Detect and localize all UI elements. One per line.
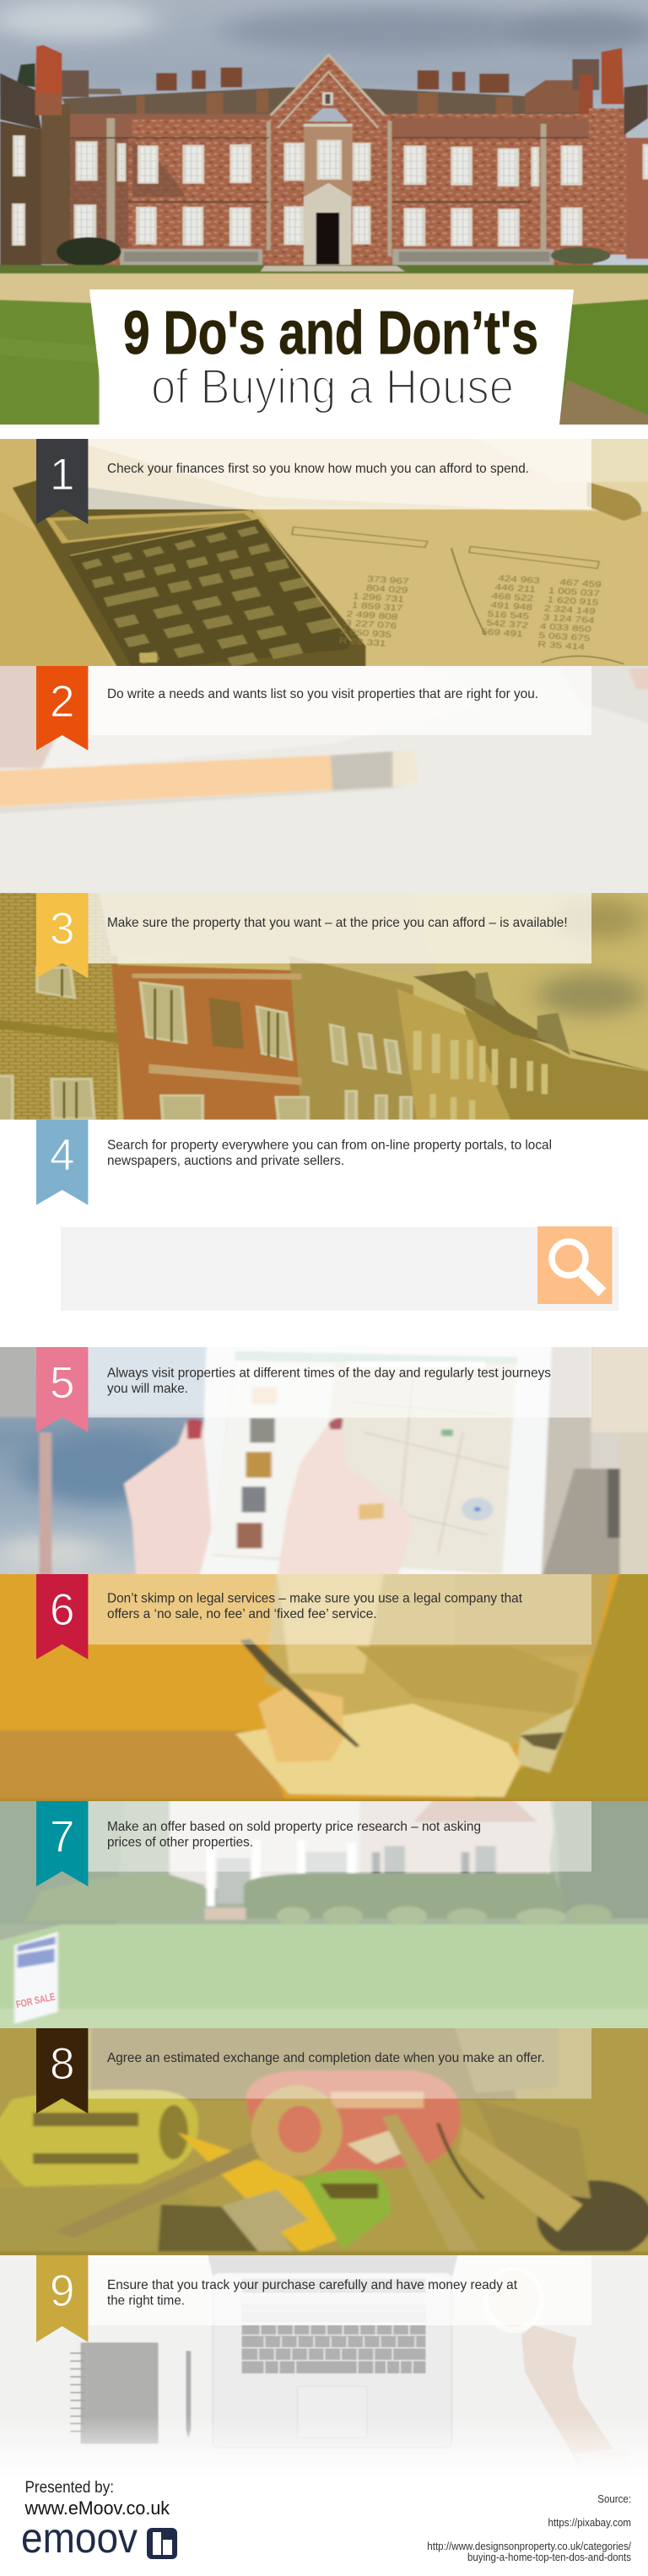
- photo: calculator and finance paperwork: [0, 434, 648, 672]
- central bay: [304, 124, 353, 203]
- text box: [88, 2255, 591, 2325]
- photo: calculator and finance paperwork: R 28 331: [338, 636, 386, 648]
- text box: [88, 1347, 591, 1418]
- photo: calculator and finance paperwork: 373 967: [367, 574, 410, 587]
- right tower and wing: [589, 108, 626, 255]
- title panel: [89, 290, 574, 425]
- main facade: [68, 114, 593, 266]
- ribbon number 9: 9: [50, 2266, 74, 2316]
- photo: calculator and finance paperwork: 424 963: [498, 573, 541, 586]
- panel: step 4: [36, 1120, 618, 1311]
- panel: step 9: [0, 2251, 648, 2479]
- ribbon number 3: [36, 893, 88, 978]
- ribbon number 1: [36, 439, 88, 524]
- source credits: buying-a-home-top-ten-dos-and-donts: [467, 2551, 631, 2563]
- step text: [107, 1820, 481, 1850]
- photo: calculator and finance paperwork: 4 050 935: [339, 626, 392, 640]
- step text: prices of other properties.: [107, 1835, 253, 1850]
- panel: step 1: [0, 434, 648, 672]
- photo: pencil on grid paper: [0, 659, 648, 897]
- text box: [88, 2028, 591, 2098]
- text box: [88, 893, 591, 964]
- text box: [88, 1574, 591, 1644]
- ribbon number 3: 3: [50, 904, 74, 954]
- ribbon number 6: 6: [50, 1585, 74, 1635]
- footer: presented by: [24, 2479, 170, 2519]
- hands: [124, 1421, 212, 1580]
- step text: Always visit properties at different times of the day and regularly test journeys: [107, 1366, 551, 1381]
- step text: Don’t skimp on legal services – make sure you use a legal company that: [107, 1592, 523, 1605]
- balustrades: [120, 249, 554, 268]
- text box: [88, 439, 591, 510]
- step text: Search for property everywhere you can from on-line property portals, to local: [107, 1138, 552, 1153]
- step text: [107, 1138, 552, 1168]
- logo: emoov: emoov: [21, 2514, 138, 2562]
- panel: step 6: [0, 1568, 648, 1809]
- ribbon number 7: 7: [50, 1812, 74, 1862]
- photo: calculator and finance paperwork: 446 211: [494, 582, 537, 594]
- icon: magnifying glass: [552, 1242, 602, 1292]
- lower windows: [75, 205, 95, 241]
- bushes: [57, 237, 122, 267]
- photo: calculator and finance paperwork: 1 859 317: [351, 600, 404, 613]
- quoins and courses: [106, 118, 547, 257]
- footer: website address: www.eMoov.co.uk: [24, 2498, 170, 2519]
- central gable: [270, 57, 381, 120]
- left wing: [0, 73, 41, 129]
- text box: [88, 666, 591, 735]
- door: [304, 183, 351, 266]
- gravel and lawn: [0, 264, 648, 274]
- source credits: https://pixabay.com: [548, 2516, 631, 2529]
- ribbon number 8: 8: [50, 2039, 74, 2089]
- hero photo: brick manor house: [0, 0, 648, 430]
- upper windows: [14, 136, 648, 246]
- photo: calculator and finance paperwork: 1 296 731: [352, 591, 405, 604]
- icon: emoov door: [147, 2528, 177, 2559]
- step text: [107, 1592, 523, 1621]
- ribbon number 9: [36, 2255, 88, 2342]
- tall chimneys: [35, 45, 62, 97]
- ribbon number 2: 2: [50, 677, 74, 727]
- source credits: Source:: [597, 2492, 631, 2505]
- photo: calculator and finance paperwork: 491 948: [490, 600, 533, 612]
- ribbon number 5: [36, 1347, 88, 1432]
- photo: pile of keys and fobs: [0, 2024, 648, 2265]
- photo: calculator and finance paperwork: 5 063 675: [538, 630, 591, 643]
- ribbon number 4: [36, 1120, 88, 1205]
- photo: calculator and finance paperwork: 2 324 149: [543, 603, 597, 616]
- ribbon number 6: [36, 1574, 88, 1659]
- text box: [88, 1801, 591, 1872]
- photo: calculator and finance paperwork: 3 227 076: [345, 618, 397, 630]
- photo: calculator and finance paperwork: 468 522: [491, 591, 534, 603]
- chimneys: [156, 68, 509, 93]
- step text: Ensure that you track your purchase carefully and have money ready at: [107, 2278, 518, 2292]
- source credits: [427, 2492, 631, 2563]
- search bar: [61, 1227, 618, 1311]
- step text: Check your finances first so you know how much you can afford to spend.: [107, 462, 529, 476]
- photo: terraced period buildings: [0, 890, 648, 1124]
- step text: [107, 1366, 551, 1396]
- ribbon number 1: 1: [50, 450, 74, 500]
- photo: house with lawn and for sale sign: [0, 1794, 648, 2036]
- search button: [537, 1226, 613, 1304]
- roof: [61, 86, 580, 115]
- photo: calculator and finance paperwork: 467 459: [559, 577, 602, 589]
- photo: hands on a tablet: [0, 1342, 648, 1580]
- photo: calculator and finance paperwork: 542 372: [486, 618, 529, 630]
- photo: calculator and finance paperwork: 516 545: [487, 609, 530, 621]
- panel: step 2: [0, 659, 648, 897]
- photo: calculator and finance paperwork: 1 620 915: [547, 594, 600, 608]
- ribbon number 7: [36, 1801, 88, 1886]
- step text: Agree an estimated exchange and completion date when you make an offer.: [107, 2051, 545, 2065]
- step text: Make an offer based on sold property price research – not asking: [107, 1820, 481, 1834]
- ribbon number 4: 4: [50, 1131, 74, 1181]
- step text: offers a ‘no sale, no fee’ and ‘fixed fee’ service.: [107, 1607, 377, 1621]
- photo: calculator and finance paperwork: R 35 414: [537, 639, 586, 652]
- title: main heading: 9 Do's and Don’t's: [123, 300, 538, 367]
- photo: writing in a notebook: [0, 1568, 648, 1809]
- photo: calculator and finance paperwork: 3 124 764: [543, 612, 596, 625]
- ribbon number 8: [36, 2028, 88, 2113]
- step text: newspapers, auctions and private sellers.: [107, 1154, 344, 1168]
- panel: step 5: [0, 1342, 648, 1580]
- step text: you will make.: [107, 1382, 188, 1396]
- photo: laptop, notebook, pencil and coffee on desk: [0, 2251, 648, 2479]
- panel: step 8: [0, 2024, 648, 2265]
- footer: presented by: Presented by:: [25, 2479, 114, 2497]
- photo: calculator and finance paperwork: 804 029: [365, 582, 408, 595]
- step text: Do write a needs and wants list so you visit properties that are right for you.: [107, 687, 538, 701]
- ribbon number 5: 5: [50, 1358, 74, 1408]
- title: subheading: of Buying a House: [151, 360, 514, 414]
- panel: step 3: [0, 890, 648, 1124]
- photo: calculator and finance paperwork: 2 499 808: [346, 609, 398, 622]
- photo: calculator and finance paperwork: 1 005 037: [548, 585, 601, 598]
- panel: step 7: [0, 1794, 648, 2036]
- step text: [107, 2278, 518, 2308]
- step text: Make sure the property that you want – at the price you can afford – is available!: [107, 916, 568, 930]
- ribbon number 2: [36, 666, 88, 750]
- photo: calculator and finance paperwork: 569 491: [481, 626, 524, 639]
- photo: calculator and finance paperwork: 4 033 850: [539, 621, 592, 634]
- sign lettering: FOR SALE: [15, 1990, 57, 2010]
- step text: the right time.: [107, 2294, 185, 2308]
